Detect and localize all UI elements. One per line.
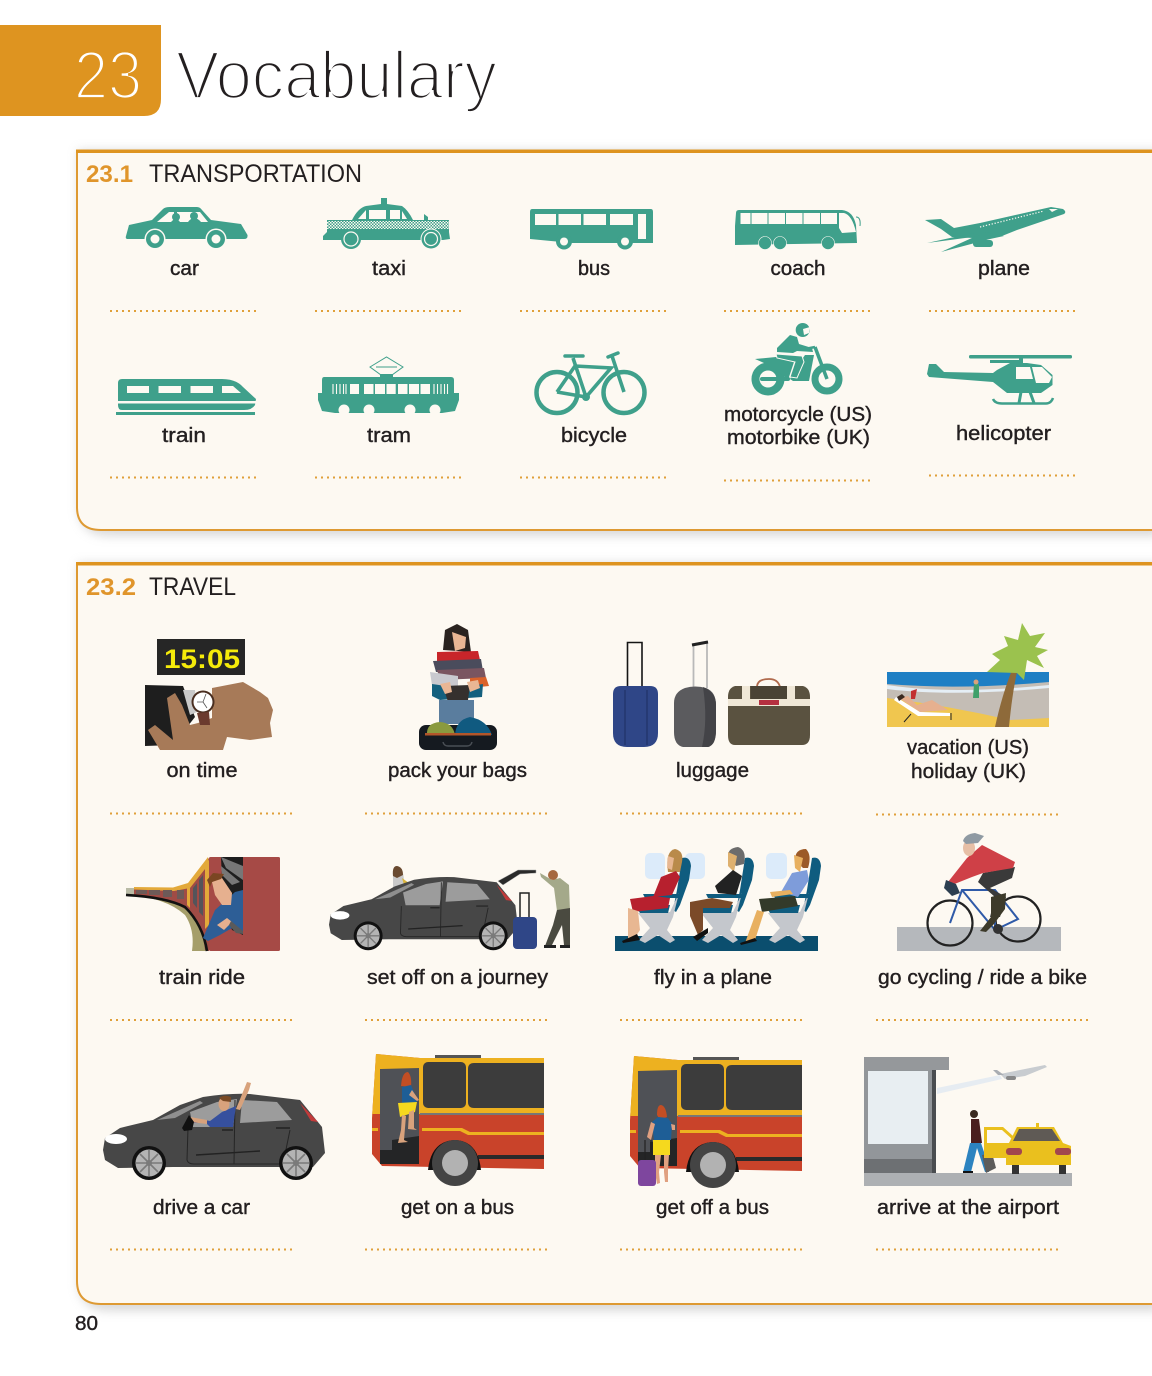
illustration: on time, clock and wrist watch xyxy=(145,639,273,750)
contrail xyxy=(937,1075,1002,1094)
label: arrive at the airport: arrive at the airport xyxy=(877,1197,1059,1219)
road xyxy=(897,927,1061,951)
plane xyxy=(993,1065,1047,1080)
panel: 23.1 transportation xyxy=(76,150,1152,536)
label: plane: plane xyxy=(978,258,1030,280)
label: helicopter: helicopter xyxy=(956,423,1051,445)
icon: car xyxy=(126,207,248,250)
icon: bus xyxy=(530,209,653,250)
label: go cycling / ride a bike: go cycling / ride a bike xyxy=(878,967,1087,989)
icon: helicopter xyxy=(927,355,1072,404)
passenger behind car xyxy=(393,866,413,890)
icon: train xyxy=(116,379,256,415)
label: vacation / holiday: vacation (US) xyxy=(907,737,1029,759)
grey suitcase xyxy=(674,642,716,747)
illustration: train ride xyxy=(126,857,280,951)
writing lines: travel xyxy=(110,814,1091,1250)
chapter number: 23 xyxy=(74,38,142,114)
blue suitcase xyxy=(613,642,658,747)
illustration: cyclist xyxy=(897,833,1061,951)
passenger 2 xyxy=(690,847,745,941)
holdall bag xyxy=(728,679,810,745)
woman with case xyxy=(638,1105,675,1186)
heading 23.2: TRAVEL xyxy=(149,573,236,601)
icon: bicycle xyxy=(536,353,644,413)
icon: coach xyxy=(735,210,860,250)
woman boarding xyxy=(398,1072,419,1143)
heading 23.1: TRANSPORTATION xyxy=(149,160,362,188)
heading 23.2: 23.2 xyxy=(86,574,136,601)
label: bus: bus xyxy=(578,258,610,280)
passenger 1 xyxy=(622,849,682,943)
label: set off on a journey: set off on a journey xyxy=(367,967,548,989)
embankment xyxy=(126,895,209,951)
label: get off a bus: get off a bus xyxy=(656,1197,769,1219)
rider xyxy=(944,833,1015,932)
traveller xyxy=(963,1110,996,1173)
label: coach: coach xyxy=(770,258,826,280)
background carriage xyxy=(209,857,280,951)
heading 23.2 xyxy=(86,573,236,601)
illustration: luggage xyxy=(613,642,810,747)
man loading xyxy=(540,870,570,948)
chapter tab xyxy=(0,25,161,116)
cabin floor xyxy=(615,936,818,951)
illustration: fly in a plane xyxy=(615,847,821,951)
label: pack your bags: pack your bags xyxy=(388,760,527,782)
driver xyxy=(182,1082,251,1131)
open boot xyxy=(498,870,536,885)
label: train: train xyxy=(162,425,206,447)
writing lines: transportation xyxy=(110,311,1079,480)
illustration: get off a bus xyxy=(630,1056,802,1188)
label: car: car xyxy=(170,258,199,280)
heading 23.1: 23.1 xyxy=(86,161,133,188)
label: get on a bus: get on a bus xyxy=(401,1197,514,1219)
bicycle xyxy=(928,890,1040,946)
header: chapter tab and title xyxy=(0,25,497,116)
label: train ride: train ride xyxy=(159,967,245,989)
label: motorcycle / motorbike: motorbike (UK) xyxy=(727,427,870,449)
label: luggage: luggage xyxy=(676,760,749,782)
terminal building xyxy=(864,1057,949,1173)
illustration: set off on a journey xyxy=(329,866,570,950)
panel: 23.2 travel xyxy=(76,562,1152,1311)
illustration: vacation beach scene xyxy=(887,623,1049,727)
label: taxi: taxi xyxy=(372,258,406,280)
icon: motorcycle xyxy=(755,323,839,392)
label: bicycle: bicycle xyxy=(561,425,627,447)
digital clock: 15:05 xyxy=(164,644,240,674)
icon: plane xyxy=(925,207,1065,252)
suitcase xyxy=(513,893,537,949)
illustration: get on a bus xyxy=(372,1054,544,1186)
icon: tram xyxy=(318,357,459,416)
label: on time: on time xyxy=(166,760,238,782)
passenger 3 xyxy=(740,849,810,945)
label: motorcycle / motorbike: motorcycle (US) xyxy=(724,404,872,426)
panel background xyxy=(76,150,1152,536)
passenger at window xyxy=(203,857,243,941)
taxi xyxy=(984,1123,1071,1174)
receding train xyxy=(126,857,209,951)
illustration: drive a car xyxy=(103,1082,325,1180)
label: vacation / holiday xyxy=(907,737,1029,783)
panel background xyxy=(76,562,1152,1311)
cabin windows xyxy=(645,853,787,879)
page number: 80 xyxy=(75,1313,98,1335)
ground xyxy=(864,1173,1072,1186)
label: tram: tram xyxy=(367,425,411,447)
label: motorcycle / motorbike xyxy=(724,404,872,449)
label: vacation / holiday: holiday (UK) xyxy=(911,761,1026,783)
label: drive a car: drive a car xyxy=(153,1197,250,1219)
illustration: arrive at the airport xyxy=(864,1057,1072,1186)
title: Vocabulary xyxy=(176,38,497,114)
illustration: pack your bags xyxy=(419,624,497,750)
icon: taxi xyxy=(323,198,450,250)
label: fly in a plane: fly in a plane xyxy=(654,967,772,989)
